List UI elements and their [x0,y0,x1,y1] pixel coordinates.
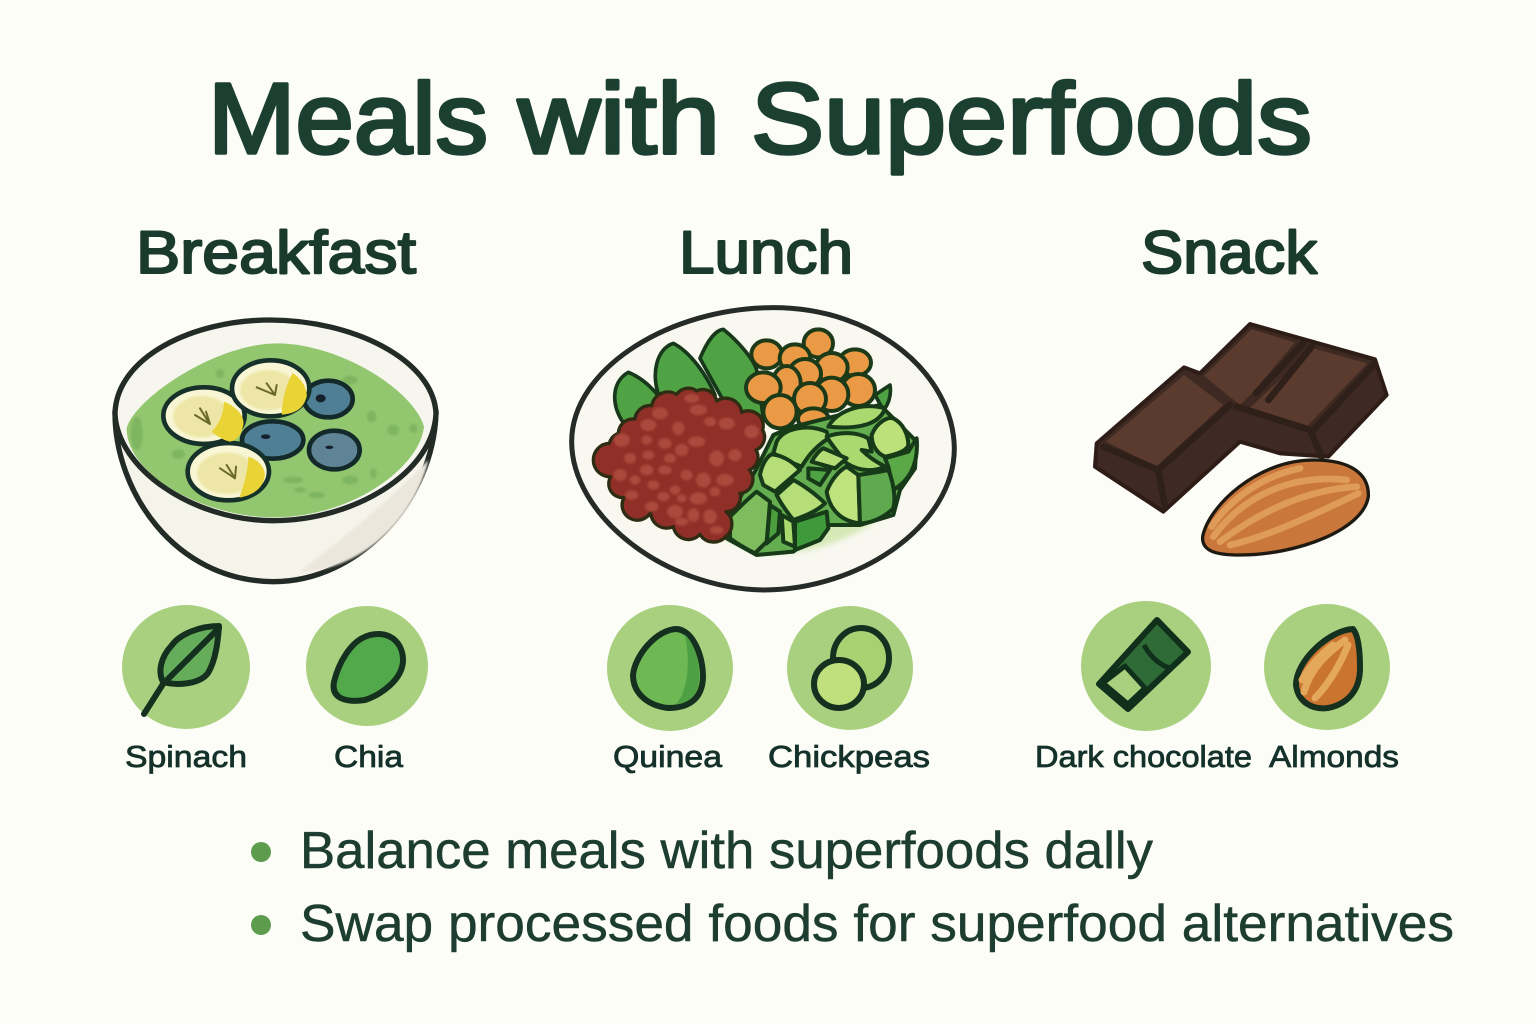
icon: quinoa [607,605,733,731]
illustration: dark chocolate and almond [1095,324,1387,555]
icon: chickpeas [787,606,913,730]
bullet text two: Swap processed foods for superfood alternatives [300,895,1454,953]
banana slices [163,360,309,500]
red quinoa [593,388,765,542]
icon: dark chocolate [1081,601,1211,731]
title: Meals [208,63,488,175]
label: quinoa: Quinea [613,739,723,774]
cucumber cubes [727,405,917,555]
chickpeas [746,329,875,430]
blueberries [242,381,360,469]
icon: spinach [122,605,250,729]
almond [1203,460,1368,555]
illustration: smoothie bowl [115,320,436,582]
label: dark chocolate: Dark chocolate [1035,739,1252,774]
illustration: plate [572,308,954,590]
bullet marker one [251,842,271,862]
label: spinach: Spinach [125,739,247,774]
heading: breakfast: Breakfast [136,219,416,286]
panel: breakfast [115,219,436,774]
label: chickpeas: Chickpeas [768,739,930,774]
title: with [517,63,720,175]
label: almonds: Almonds [1269,739,1399,774]
bullet marker two [251,915,271,935]
bullet text one: Balance meals with superfoods dally [300,822,1153,880]
label: chia: Chia [334,739,404,774]
icon: chia [306,606,428,726]
panel: snack [1035,219,1399,774]
title [208,63,1312,175]
icon: almond [1264,604,1390,730]
heading: snack: Snack [1141,219,1318,286]
bullet list [251,822,1454,953]
title: Superfoods [751,63,1312,175]
panel: lunch [572,219,954,774]
spinach leaves [615,329,890,425]
heading: lunch: Lunch [679,219,853,286]
